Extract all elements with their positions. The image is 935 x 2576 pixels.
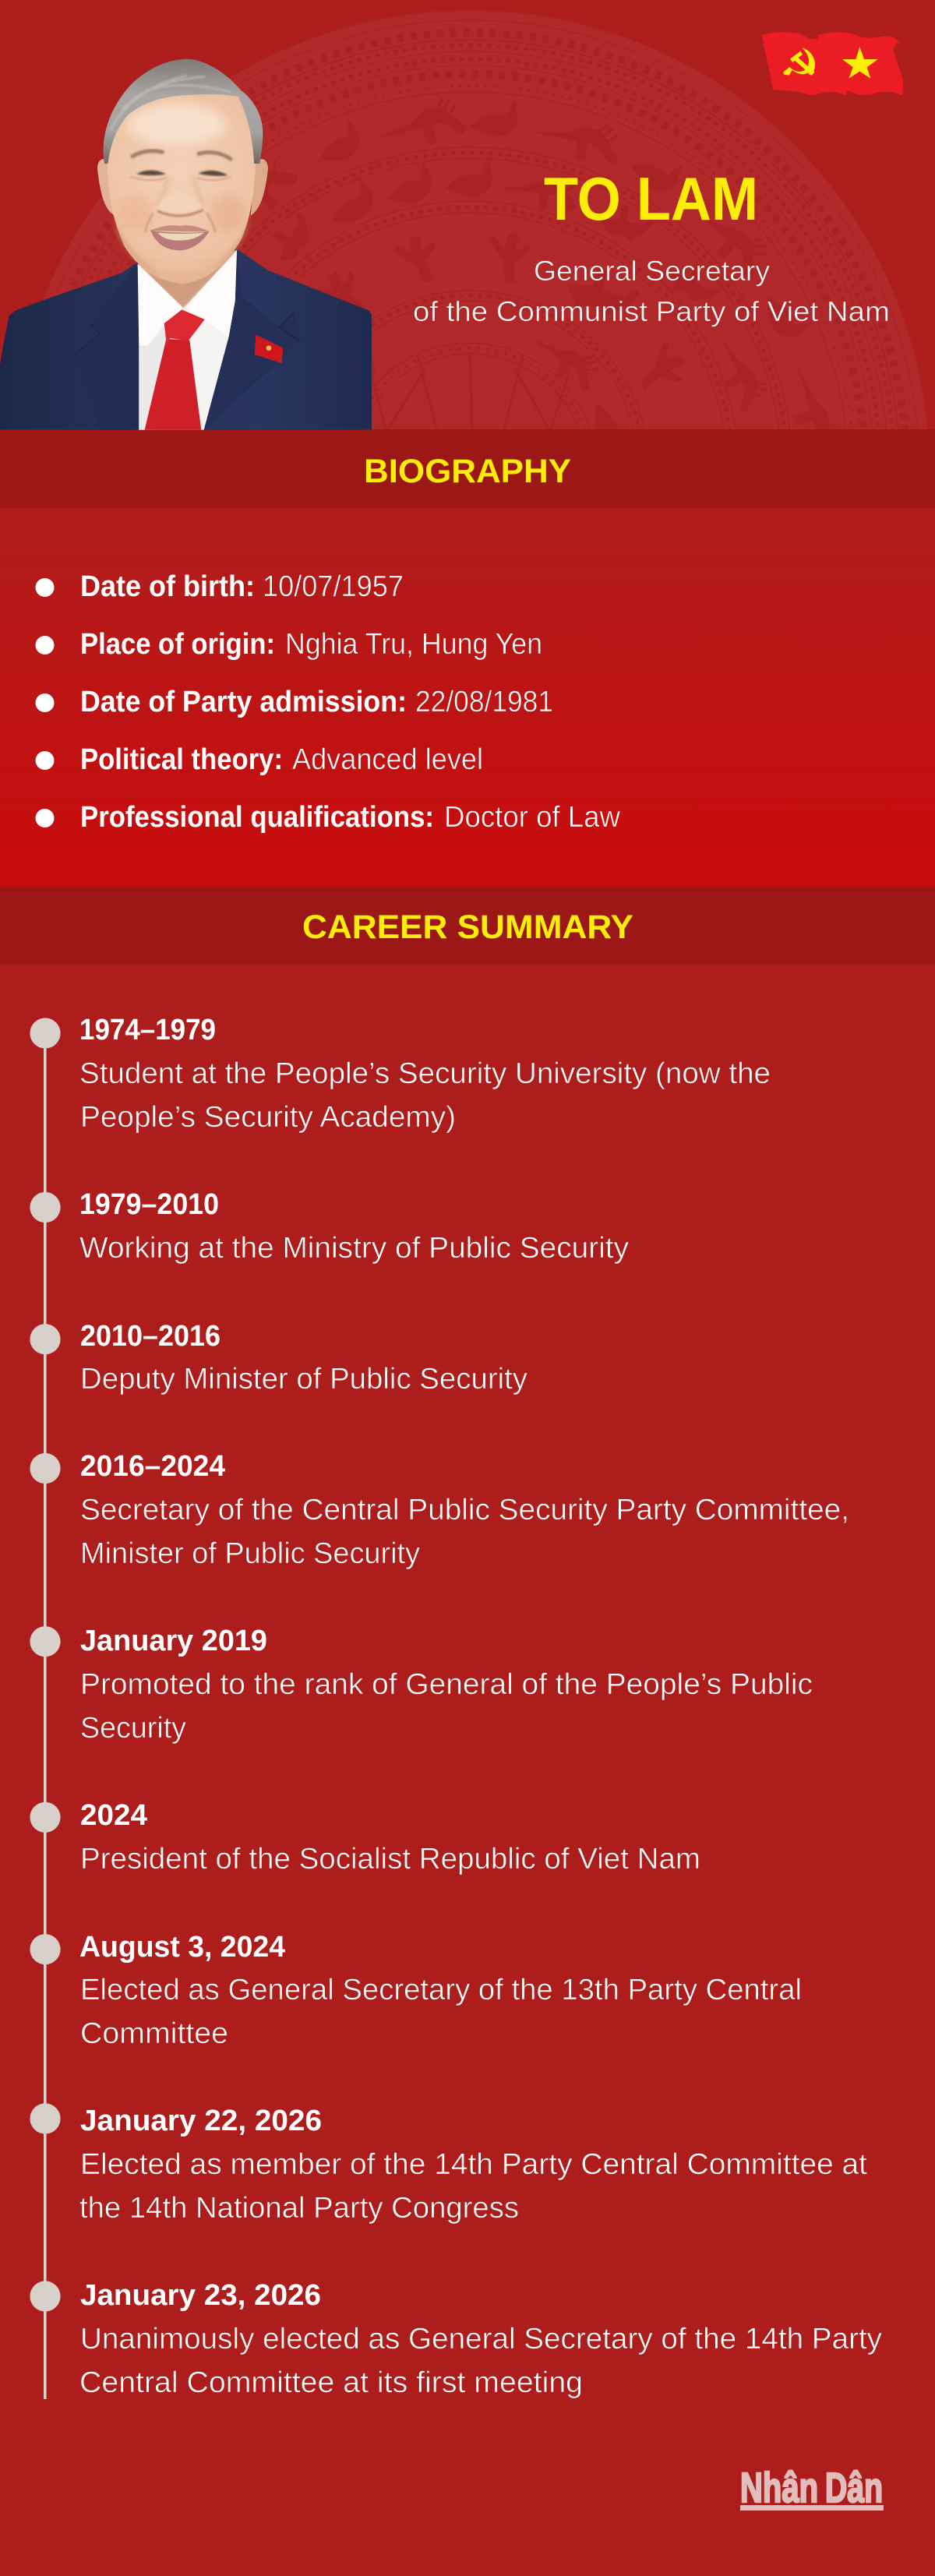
bullet: date of party admission: Date of Party admission: — [80, 686, 407, 718]
biography heading band — [0, 429, 935, 508]
bullet: professional qualifications: Doctor of Law — [444, 801, 621, 834]
entry: 2024: 2024 — [80, 1799, 147, 1832]
entry: January 23, 2026: January 23, 2026 — [80, 2279, 321, 2312]
entry: January 23, 2026: Unanimously elected as General Secretary of the 14th Party — [80, 2323, 882, 2355]
name: TO LAM — [544, 164, 758, 233]
entry: January 2019: Promoted to the rank of General of the People’s Public — [80, 1668, 813, 1701]
entry: 2010-2016: Deputy Minister of Public Security — [80, 1363, 527, 1396]
entry: August 3, 2024 — [30, 1931, 802, 2050]
entry: January 23, 2026 — [30, 2279, 882, 2399]
entry: January 22, 2026: the 14th National Party Congress — [79, 2192, 519, 2225]
biography panel background — [0, 508, 935, 886]
biography list — [36, 570, 621, 834]
entry: 2016-2024 — [30, 1450, 849, 1570]
timeline line — [44, 1033, 47, 2399]
entry: 1974-1979: People’s Security Academy) — [80, 1101, 456, 1134]
entry: 1979-2010: 1979–2010 — [79, 1188, 219, 1221]
bullet: place of origin: Nghia Tru, Hung Yen — [285, 628, 542, 661]
entry: January 2019 — [30, 1625, 813, 1745]
bullet: date of birth: Date of birth: — [80, 570, 255, 603]
entry: 1974-1979: 1974–1979 — [79, 1014, 216, 1046]
bullet: date of birth — [36, 570, 404, 603]
entry: January 2019: January 2019 — [80, 1625, 267, 1657]
entry: 2016-2024: Secretary of the Central Public Security Party Committee, — [80, 1494, 849, 1526]
bullet: date of party admission — [36, 686, 553, 718]
entry: August 3, 2024: Elected as General Secretary of the 13th Party Central — [80, 1974, 802, 2006]
entry: 2010-2016: 2010–2016 — [80, 1320, 221, 1353]
bullet: place of origin — [36, 628, 542, 661]
title block — [413, 164, 890, 327]
career summary heading band: CAREER SUMMARY — [302, 909, 633, 946]
flag of the Communist Party — [762, 32, 903, 96]
portrait photo — [0, 59, 372, 430]
bullet: political theory: Political theory: — [80, 743, 283, 776]
entry: 2016-2024: Minister of Public Security — [80, 1537, 420, 1570]
entry: January 23, 2026: Central Committee at its first meeting — [79, 2366, 583, 2399]
bullet: political theory: Advanced level — [292, 743, 483, 776]
entry: 2024: President of the Socialist Republic of Viet Nam — [80, 1843, 700, 1876]
entry: 1979-2010 — [30, 1188, 629, 1265]
entry: January 2019: Security — [80, 1712, 186, 1745]
career summary heading band — [0, 886, 935, 965]
bullet: professional qualifications — [36, 801, 621, 834]
entry: 2010-2016 — [30, 1320, 527, 1396]
role line 1: General Secretary — [534, 255, 770, 287]
bullet: political theory — [36, 743, 483, 776]
entry: January 22, 2026: January 22, 2026 — [80, 2105, 322, 2137]
bullet: professional qualifications: Professional qualifications: — [80, 801, 434, 834]
entry: 1974-1979: Student at the People’s Security University (now the — [79, 1057, 771, 1090]
bullet: place of origin: Place of origin: — [80, 628, 275, 661]
entry: August 3, 2024: Committee — [80, 2017, 228, 2050]
bullet: date of party admission: 22/08/1981 — [415, 686, 553, 718]
entry: January 22, 2026: Elected as member of the 14th Party Central Committee at — [80, 2148, 867, 2181]
Nhan Dan logo: Dân — [825, 2465, 883, 2511]
bronze drum background pattern — [10, 10, 930, 930]
entry: 2016-2024: 2016–2024 — [80, 1450, 225, 1483]
role line 2: of the Communist Party of Viet Nam — [413, 295, 890, 327]
bullet: date of birth: 10/07/1957 — [263, 570, 404, 603]
entry: 2024 — [30, 1799, 700, 1876]
Nhan Dan logo: Nhân — [740, 2465, 818, 2511]
career timeline — [30, 1014, 882, 2399]
entry: January 22, 2026 — [30, 2103, 867, 2225]
biography heading band: BIOGRAPHY — [364, 453, 571, 490]
entry: 1979-2010: Working at the Ministry of Public Security — [79, 1232, 629, 1265]
entry: 1974-1979 — [30, 1014, 771, 1134]
entry: August 3, 2024: August 3, 2024 — [79, 1931, 285, 1964]
